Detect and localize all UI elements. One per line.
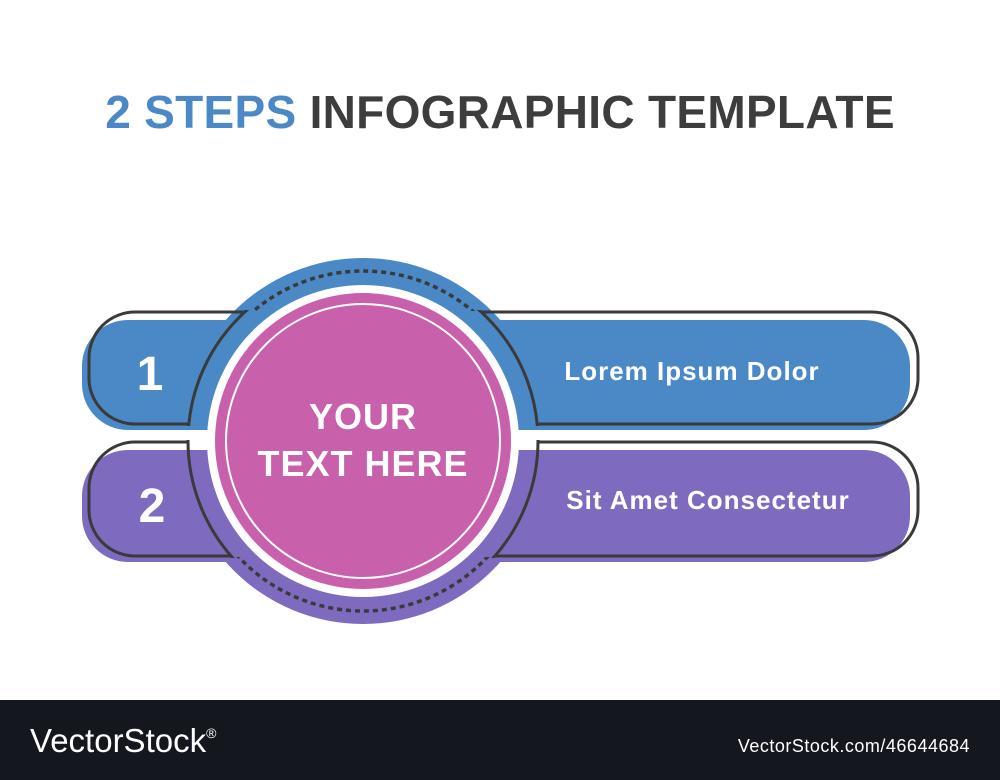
bar 1 fill [82, 320, 910, 430]
bar 2 fill [82, 450, 910, 562]
footer: ® [206, 725, 217, 741]
title: 2 STEPS INFOGRAPHIC TEMPLATE [105, 86, 895, 138]
center circle: YOUR [309, 396, 417, 437]
step 1 number: 1 [137, 348, 163, 401]
footer [0, 700, 1000, 780]
dashed rings [193, 271, 533, 611]
step 2 label: Sit Amet Consectetur [566, 485, 850, 515]
bar outlines [88, 310, 920, 558]
footer: VectorStock.com/46644684 [738, 736, 970, 756]
center circle: TEXT HERE [257, 443, 469, 484]
center circle [207, 285, 519, 597]
footer: VectorStock [30, 722, 206, 759]
step 2 number: 2 [139, 480, 165, 533]
step 1 label: Lorem Ipsum Dolor [564, 356, 820, 386]
outer circle [180, 258, 550, 624]
